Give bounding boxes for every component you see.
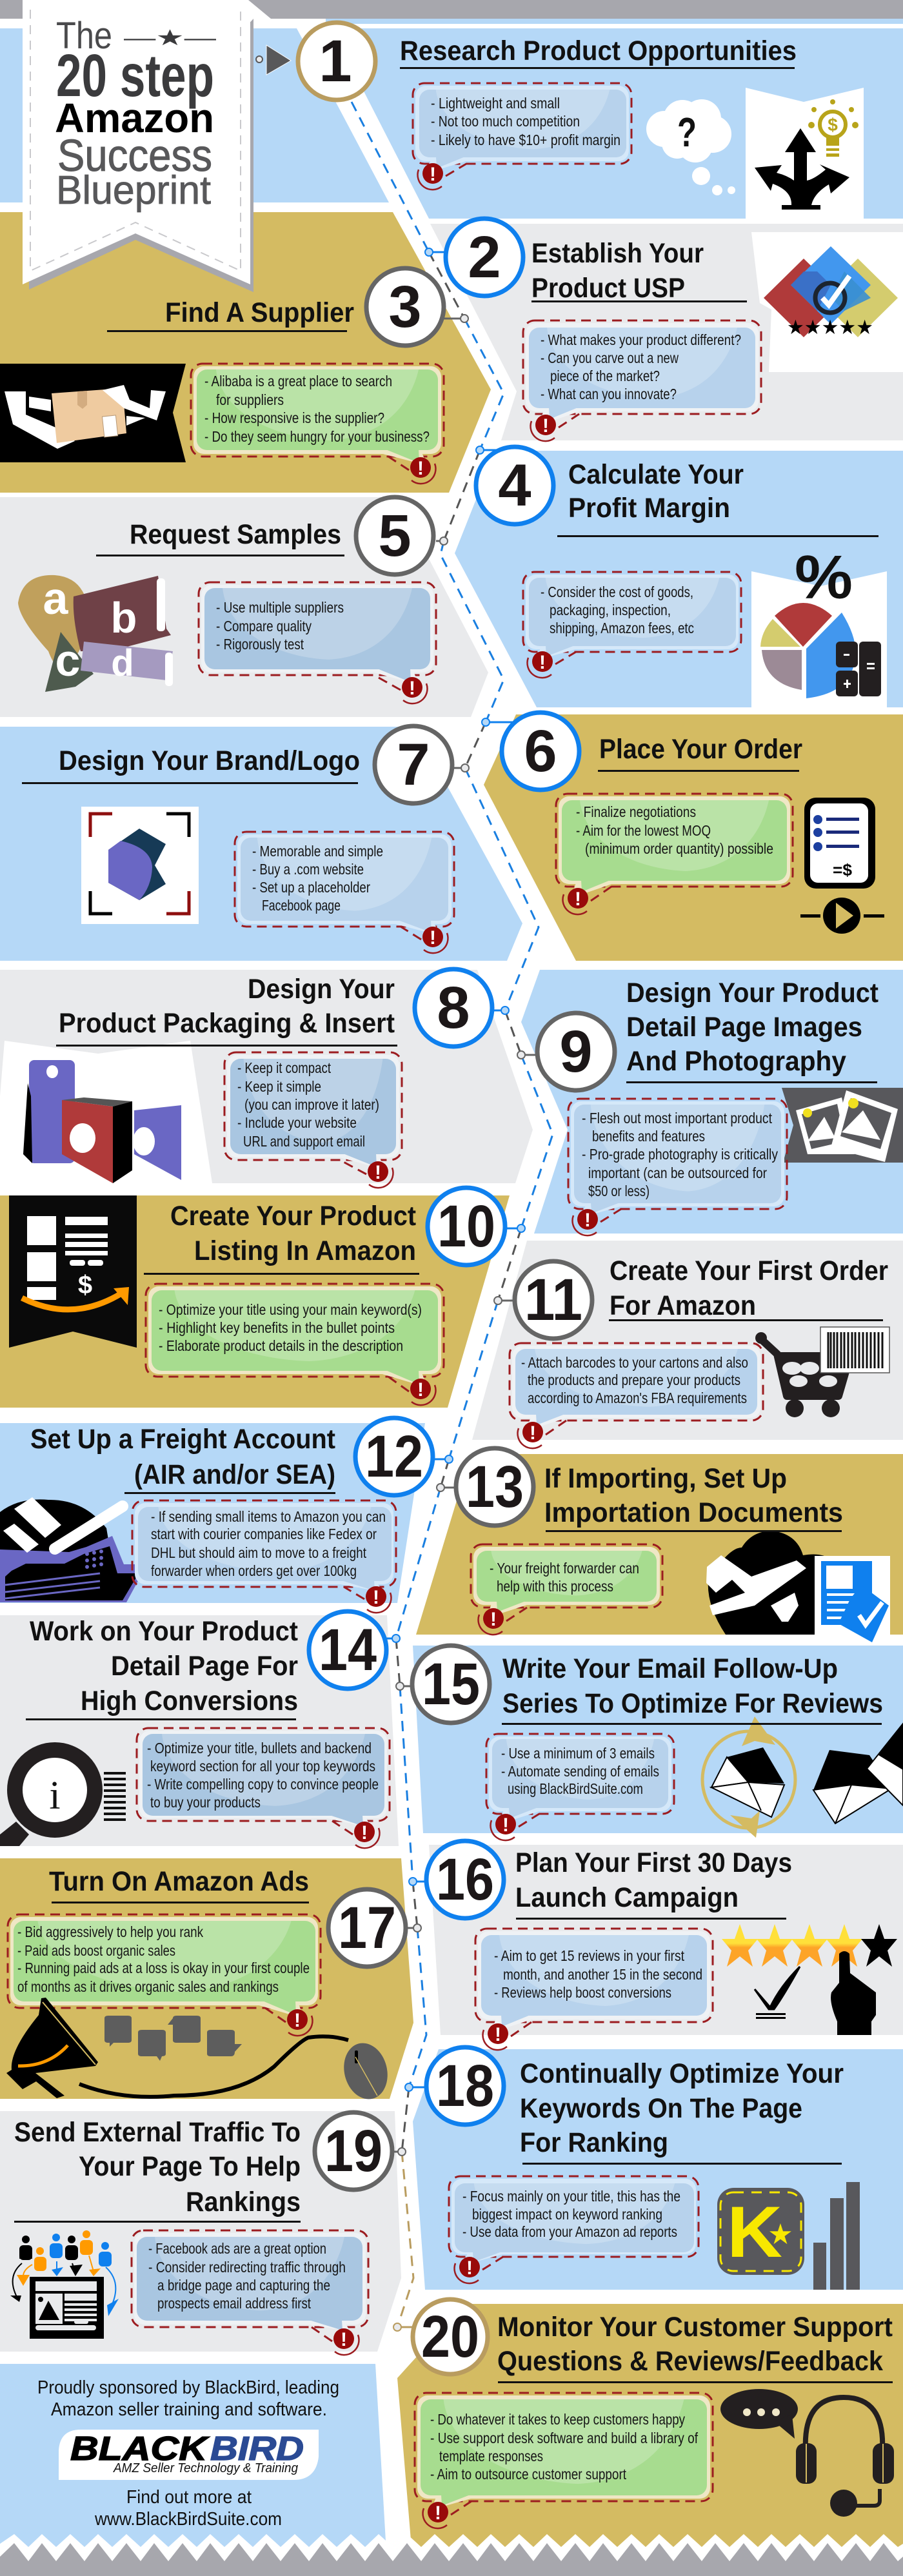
step 2 callout: - Can you carve out a new [541, 349, 679, 366]
panel: step 1 left [0, 28, 389, 202]
step 12 callout [132, 1500, 396, 1613]
step 13 icon: import globe, plane and documents [706, 1531, 890, 1644]
badge 11: 11 [524, 1267, 582, 1333]
badge 15 [396, 1646, 490, 1723]
step 12 callout: forwarder when orders get over 100kg [151, 1562, 357, 1579]
step 18 icon: keyword badge and bars: ★ [768, 2219, 793, 2250]
step 16 callout: - Reviews help boost conversions [494, 1984, 671, 2001]
step 8 heading: Design Your [248, 974, 395, 1005]
step 16 callout: - Aim to get 15 reviews in your first [494, 1947, 685, 1964]
step 10 heading: Listing In Amazon [194, 1235, 416, 1266]
step 17 heading: Turn On Amazon Ads [49, 1866, 309, 1897]
sponsor text: Amazon seller training and software. [51, 2399, 327, 2420]
step 3 callout [191, 364, 444, 484]
step 14 heading [26, 1616, 298, 1720]
step 18 heading: Continually Optimize Your [520, 2058, 844, 2089]
badge 9: 9 [559, 1019, 593, 1085]
step 8 callout: URL and support email [243, 1133, 365, 1150]
icon: start arrow [256, 45, 291, 75]
step 13 callout: help with this process [497, 1578, 613, 1595]
step 12 callout: - If sending small items to Amazon you can [151, 1508, 386, 1525]
title text: 20 step [56, 42, 214, 109]
panel: step 6 [484, 714, 903, 961]
step 2 icon: diamonds rating: ★★★★★ [787, 316, 873, 339]
panel: step 12 [0, 1423, 425, 1603]
step 15 heading [502, 1653, 883, 1725]
step 11 heading [609, 1255, 888, 1321]
step 16 heading [515, 1847, 792, 1920]
panel: step 3 [0, 212, 491, 493]
badge 10 [428, 1188, 525, 1265]
step 18 callout: ! [466, 2257, 473, 2279]
step 10 callout [146, 1284, 444, 1405]
step 1 callout [413, 83, 631, 190]
panel: step 13 [416, 1454, 903, 1635]
step 17 callout: of months as it drives organic sales and rankings [17, 1978, 279, 1995]
step 19 callout [132, 2230, 368, 2355]
step 12 icon: plane and ship [0, 1497, 147, 1602]
step 18 callout: biggest impact on keyword ranking [472, 2206, 662, 2223]
badge 12: 12 [365, 1424, 423, 1490]
badge 16 [409, 1841, 504, 1918]
step 19 callout: prospects email address first [157, 2295, 311, 2312]
step 8 callout: - Keep it compact [237, 1059, 331, 1076]
title banner ribbon [23, 0, 271, 292]
step 10 callout: - Optimize your title using your main keyword(s) [159, 1301, 422, 1318]
footer zigzag edge [0, 2534, 903, 2576]
step 10 heading [144, 1201, 419, 1275]
step 9 callout [568, 1099, 787, 1235]
step 19 heading [14, 2117, 301, 2223]
panel: step 7 [0, 727, 522, 961]
step 20 callout: - Do whatever it takes to keep customers happy [430, 2411, 685, 2428]
step 12 callout: ! [373, 1587, 379, 1608]
step 20 callout [415, 2393, 713, 2528]
step 4 heading [557, 459, 878, 537]
badge 20: 20 [421, 2304, 479, 2370]
badge 8 [415, 969, 509, 1047]
badge 11 [494, 1261, 592, 1339]
step 14 callout: to buy your products [150, 1794, 261, 1811]
panel: step 8 [0, 970, 533, 1183]
step 2 heading: Establish Your [531, 238, 704, 269]
step 3 callout: - How responsive is the supplier? [204, 409, 384, 426]
step 6 callout: (minimum order quantity) possible [585, 840, 773, 857]
step 11 callout: the products and prepare your products [528, 1372, 740, 1388]
step 14 callout: ! [361, 1822, 368, 1844]
step 6 callout: - Finalize negotiations [576, 803, 696, 820]
badge 15: 15 [422, 1651, 480, 1717]
step 5 icon: letter blocks a b c d: c [55, 635, 80, 685]
badge 18 [405, 2047, 504, 2125]
step 13 callout [471, 1544, 662, 1635]
BlackBird logo: BIRD [210, 2430, 304, 2468]
background: top band [0, 0, 903, 24]
badge 20 [393, 2299, 488, 2374]
step 15 callout: - Automate sending of emails [501, 1763, 659, 1780]
badge 5: 5 [378, 503, 412, 569]
badge 10: 10 [437, 1194, 495, 1259]
step 15 callout: using BlackBirdSuite.com [508, 1780, 643, 1797]
step 19 icon: people directed to a web page [10, 2230, 119, 2339]
step 13 heading: Importation Documents [544, 1497, 843, 1528]
step 10 callout: - Elaborate product details in the description [159, 1337, 403, 1354]
step 5 callout: - Compare quality [216, 618, 312, 634]
step 18 heading: For Ranking [520, 2127, 668, 2158]
BlackBird logo: BLACK [70, 2430, 210, 2468]
step 2 heading [531, 238, 747, 304]
step 13 callout: ! [490, 1609, 497, 1630]
step 9 callout: important (can be outsourced for [588, 1165, 767, 1181]
step 5 callout [199, 582, 436, 703]
step 14 callout: - Write compelling copy to convince people [147, 1776, 379, 1793]
step 10 callout: - Highlight key benefits in the bullet points [159, 1319, 395, 1336]
panel: step 1 right [332, 28, 903, 219]
step 7 callout: ! [430, 927, 436, 949]
step 9 callout: benefits and features [592, 1128, 705, 1145]
step 7 callout: Facebook page [262, 897, 341, 914]
badge 8: 8 [437, 975, 470, 1041]
step 6 icon: checklist and play button: =$ [833, 860, 853, 880]
step 16 callout: ! [495, 2024, 501, 2045]
step 10 callout: ! [417, 1379, 424, 1401]
step 6 heading: Place Your Order [599, 734, 802, 765]
step 18 heading [520, 2058, 844, 2165]
badge 14: 14 [319, 1617, 377, 1683]
step 9 heading: Detail Page Images [626, 1012, 862, 1043]
step 4 callout: shipping, Amazon fees, etc [550, 620, 694, 636]
step 3 callout: - Do they seem hungry for your business? [204, 428, 430, 445]
badge 12 [355, 1418, 453, 1495]
step 2 callout: - What can you innovate? [541, 386, 677, 402]
step 14 icon: magnifier with info: i [49, 1774, 61, 1818]
step 15 heading: Write Your Email Follow-Up [502, 1653, 838, 1684]
step 1 icon: thought cloud [646, 99, 735, 195]
step 8 callout: ! [375, 1162, 381, 1183]
badge 1: 1 [319, 28, 352, 94]
step 19 callout: a bridge page and capturing the [157, 2277, 330, 2294]
step 14 callout: - Optimize your title, bullets and backend [147, 1740, 372, 1756]
step 13 heading [544, 1463, 843, 1532]
step 1 icon: thought cloud: ? [677, 109, 697, 155]
step 19 callout: ! [341, 2329, 347, 2350]
step 10 icon: listing ribbon with smile: $ [78, 1271, 92, 1299]
step 14 callout: keyword section for all your top keywords [150, 1758, 375, 1775]
step 17 callout: - Bid aggressively to help you rank [17, 1923, 203, 1940]
badge 7: 7 [397, 732, 430, 798]
badge 19 [315, 2112, 406, 2190]
step 1 heading: Research Product Opportunities [400, 35, 797, 66]
title text: —★— [124, 26, 216, 50]
step 20 callout: ! [435, 2502, 441, 2524]
step 10 icon: listing ribbon with smile [9, 1195, 137, 1348]
step 20 callout: - Aim to outsource customer support [430, 2466, 627, 2483]
badge 14 [309, 1611, 400, 1689]
step 20 icon: headset and chat bubble [720, 2389, 894, 2517]
step 1 icon: crossroads and lightbulb: $ [828, 115, 838, 135]
badge 17 [328, 1889, 421, 1967]
panel: step 15 [413, 1646, 903, 1833]
step 7 icon: logo design frame [81, 807, 199, 924]
step 7 heading [22, 745, 360, 784]
sponsor link text: Find out more at [126, 2487, 252, 2508]
step 3 icon: hands passing a package [0, 364, 186, 462]
step 2 callout: - What makes your product different? [541, 331, 741, 348]
badge 2: 2 [468, 224, 501, 290]
step 4 icon: percent pie and calculator: % [795, 543, 853, 612]
step 3 heading [107, 297, 354, 332]
step 3 callout: for suppliers [216, 391, 284, 408]
step 15 callout: - Use a minimum of 3 emails [501, 1745, 655, 1762]
sponsor link text: www.BlackBirdSuite.com [94, 2509, 282, 2530]
BlackBird logo: AMZ Seller Technology & Training [113, 2461, 298, 2475]
step 11 callout: ! [530, 1422, 536, 1444]
panel: step 16 [429, 1845, 903, 2035]
step 19 callout: - Consider redirecting traffic through [148, 2259, 346, 2276]
step 6 callout: - Aim for the lowest MOQ [576, 822, 711, 839]
step 6 callout: ! [575, 889, 581, 910]
step 4 callout: - Consider the cost of goods, [541, 584, 693, 600]
step 6 callout [556, 794, 793, 914]
step 18 callout [449, 2176, 699, 2283]
badge 4 [476, 446, 553, 524]
step 9 callout: - Pro-grade photography is critically [582, 1146, 778, 1163]
step 20 callout: - Use support desk software and build a library of [430, 2430, 699, 2446]
step 7 heading: Design Your Brand/Logo [59, 745, 360, 776]
step 17 callout: - Running paid ads at a loss is okay in your first couple [17, 1960, 310, 1976]
badge 9 [517, 1013, 615, 1090]
step 11 callout [510, 1343, 763, 1448]
step 9 heading [626, 978, 878, 1083]
step 4 icon: percent pie and calculator [751, 543, 887, 707]
step 17 icon: megaphone, chat bubbles and mouse [6, 1998, 393, 2104]
BlackBird logo [59, 2430, 319, 2480]
step 1 callout: - Likely to have $10+ profit margin [431, 132, 620, 148]
step 16 heading: Plan Your First 30 Days [515, 1847, 792, 1878]
step 11 callout: according to Amazon's FBA requirements [528, 1390, 747, 1406]
sponsor text: Proudly sponsored by BlackBird, leading [37, 2377, 339, 2398]
badge 4: 4 [498, 453, 531, 518]
step 16 heading: Launch Campaign [515, 1882, 739, 1913]
step 9 icon: photographs [782, 1088, 903, 1163]
step 9 heading: And Photography [626, 1046, 846, 1077]
title text: Success [57, 130, 212, 181]
step 12 heading: (AIR and/or SEA) [134, 1459, 335, 1490]
step 5 callout: ! [409, 678, 415, 699]
step 8 heading: Product Packaging & Insert [59, 1008, 395, 1039]
step 18 callout: - Focus mainly on your title, this has the [462, 2188, 680, 2205]
badge 18: 18 [436, 2053, 494, 2119]
step 3 heading: Find A Supplier [165, 297, 354, 328]
panel: step 5 [0, 497, 488, 717]
badge 17: 17 [338, 1895, 396, 1961]
step 7 callout: - Buy a .com website [252, 861, 364, 878]
badge 6 [482, 713, 579, 790]
panel: step 14 [0, 1615, 399, 1846]
step 1 callout: - Not too much competition [431, 113, 580, 130]
step 14 heading: High Conversions [81, 1686, 298, 1716]
title text [55, 15, 216, 213]
step 14 heading: Detail Page For [111, 1651, 298, 1682]
step 9 callout: ! [584, 1210, 591, 1231]
step 15 icon: email cycle [702, 1716, 903, 1838]
step 18 icon: keyword badge and bars: K [727, 2192, 782, 2272]
badge 13 [437, 1448, 533, 1526]
step 3 callout: - Alibaba is a great place to search [204, 373, 392, 389]
step 7 callout: - Memorable and simple [252, 843, 383, 860]
panel: step 20 [397, 2304, 903, 2563]
badge 3: 3 [388, 274, 422, 340]
step 8 callout: - Include your website [237, 1114, 357, 1131]
route: dashed zigzag path between steps [352, 102, 553, 2327]
step 19 heading: Rankings [186, 2187, 301, 2217]
step 16 icon: stars rating and hand [722, 1924, 897, 2035]
sponsor text [37, 2377, 339, 2420]
step 9 callout: - Flesh out most important product [582, 1110, 773, 1126]
step 13 heading: If Importing, Set Up [544, 1463, 787, 1494]
step 10 heading: Create Your Product [170, 1201, 416, 1232]
step 5 callout: - Rigorously test [216, 636, 304, 653]
badge 5 [356, 497, 448, 575]
step 20 callout: template responses [439, 2448, 543, 2464]
step 4 heading: Profit Margin [568, 493, 730, 524]
step 16 callout: month, and another 15 in the second [503, 1966, 702, 1983]
title text: Amazon [55, 95, 214, 141]
step 5 heading: Request Samples [130, 519, 341, 550]
title text: The [56, 15, 112, 57]
step 17 callout [8, 1914, 321, 2036]
step 2 heading: Product USP [531, 273, 685, 304]
panel: step 2 [430, 224, 903, 440]
step 4 heading: Calculate Your [568, 459, 744, 490]
step 4 callout [523, 572, 741, 678]
step 7 callout: - Set up a placeholder [252, 879, 370, 896]
badge 19: 19 [324, 2118, 382, 2184]
step 12 callout: start with courier companies like Fedex or [151, 1526, 377, 1542]
step 6 icon: checklist and play button [800, 798, 884, 934]
step 12 heading [30, 1424, 335, 1494]
badge 1 [298, 23, 375, 100]
panel: step 9 [521, 970, 903, 1234]
step 9 heading: Design Your Product [626, 978, 878, 1008]
step 5 callout: - Use multiple suppliers [216, 599, 344, 616]
step 13 callout: - Your freight forwarder can [490, 1560, 639, 1577]
step 8 callout: (you can improve it later) [244, 1096, 379, 1113]
step 12 heading: Set Up a Freight Account [30, 1424, 335, 1455]
panel: step 19 [0, 2111, 401, 2352]
step 14 icon: magnifier with info [0, 1750, 126, 1846]
step 5 icon: letter blocks a b c d [18, 573, 173, 692]
badge 16: 16 [436, 1847, 494, 1912]
step 3 callout: ! [417, 458, 424, 479]
badge 2 [425, 219, 523, 296]
step 18 callout: - Use data from your Amazon ad reports [462, 2223, 677, 2240]
step 1 callout: ! [430, 164, 436, 185]
panel: step 17 [0, 1858, 413, 2099]
step 2 icon: diamonds rating [751, 232, 903, 372]
badge 3 [366, 268, 468, 346]
step 8 callout [224, 1052, 402, 1188]
step 1 callout: - Lightweight and small [431, 95, 560, 112]
step 2 callout [523, 320, 761, 441]
step 18 icon: keyword badge and bars [717, 2182, 860, 2290]
step 20 heading [497, 2312, 893, 2383]
panel: step 18 [413, 2049, 903, 2290]
step 20 heading: Questions & Reviews/Feedback [497, 2346, 883, 2377]
sponsor link text [94, 2487, 282, 2530]
step 8 heading [56, 974, 397, 1047]
step 11 heading: For Amazon [610, 1290, 756, 1321]
step 5 icon: letter blocks a b c d: b [111, 594, 137, 642]
title text: Blueprint [56, 168, 211, 213]
step 4 callout: ! [539, 652, 546, 673]
step 17 callout: - Paid ads boost organic sales [17, 1942, 175, 1959]
panel: step 4 [455, 451, 903, 707]
step 18 heading: Keywords On The Page [520, 2093, 802, 2124]
step 2 callout: piece of the market? [550, 368, 660, 384]
step 19 callout: - Facebook ads are a great option [148, 2240, 326, 2257]
badge 7 [375, 726, 469, 803]
step 5 icon: letter blocks a b c d: a [43, 573, 69, 624]
step 15 callout [486, 1734, 674, 1840]
step 1 icon: crossroads and lightbulb [746, 88, 864, 219]
panel: sponsor footer [0, 2364, 387, 2563]
step 12 callout: DHL but should aim to move to a freight [151, 1544, 366, 1561]
badge 6: 6 [524, 718, 557, 784]
step 19 heading: Send External Traffic To [14, 2117, 301, 2148]
step 5 heading [96, 519, 344, 556]
step 11 icon: cart and barcode [755, 1327, 889, 1417]
step 2 callout: ! [542, 415, 549, 437]
badge 13: 13 [466, 1454, 524, 1520]
panel: step 10 [0, 1195, 510, 1408]
step 8 callout: - Keep it simple [237, 1078, 321, 1095]
step 11 callout: - Attach barcodes to your cartons and also [521, 1354, 748, 1371]
step 8 icon: product packaging [0, 1041, 212, 1183]
step 9 callout: $50 or less) [588, 1183, 650, 1199]
step 4 callout: packaging, inspection, [550, 602, 671, 618]
step 17 callout: ! [294, 2010, 301, 2031]
step 15 callout: ! [502, 1814, 509, 1836]
panel: step 11 [472, 1241, 903, 1440]
step 5 icon: letter blocks a b c d: d [111, 642, 134, 684]
step 19 heading: Your Page To Help [79, 2151, 301, 2182]
step 14 heading: Work on Your Product [30, 1616, 298, 1647]
step 16 callout [475, 1929, 713, 2050]
step 14 callout [137, 1728, 390, 1848]
step 7 callout [235, 832, 454, 953]
